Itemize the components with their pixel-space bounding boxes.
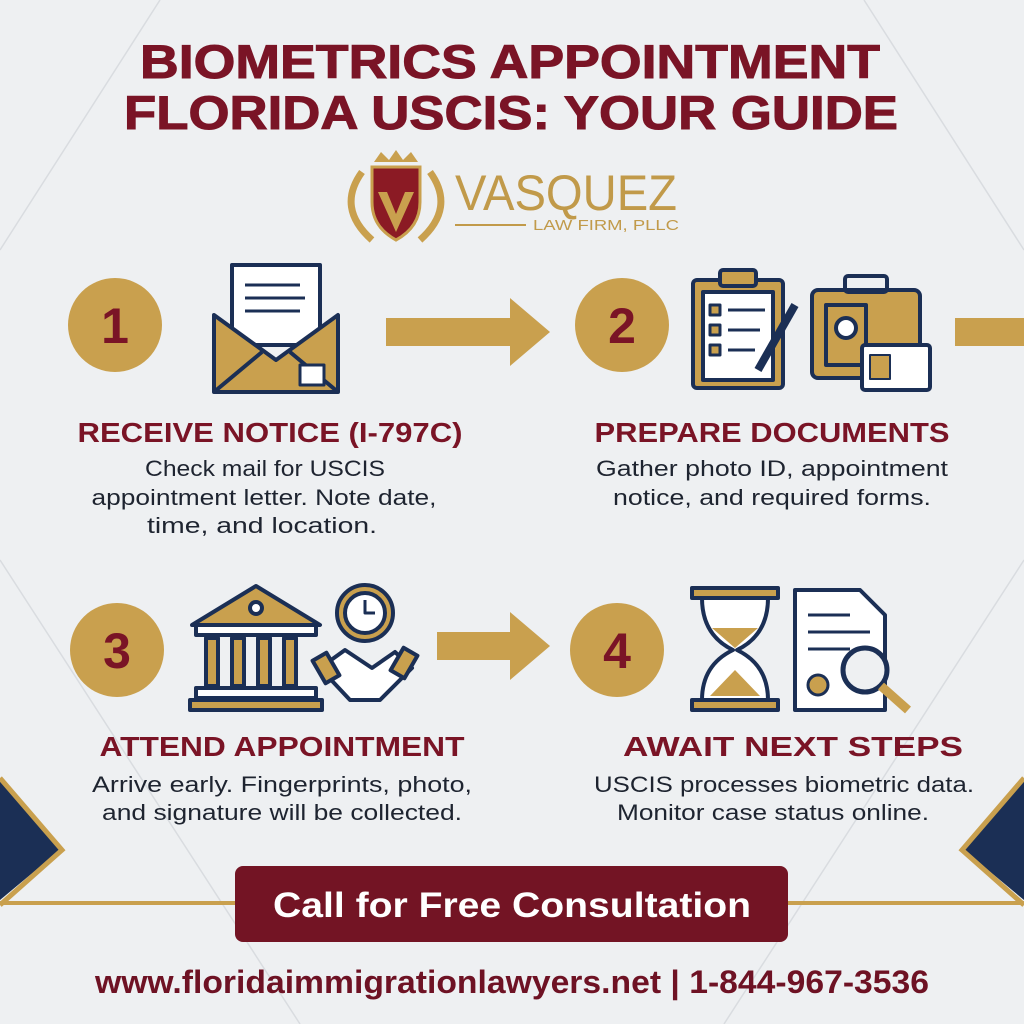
contact line: www.floridaimmigrationlawyers.net | 1-844-967-3536 — [94, 964, 929, 1000]
step 3 text: ATTEND APPOINTMENT — [100, 731, 464, 762]
corner decoration right — [962, 778, 1024, 905]
icon: hourglass and document search — [692, 588, 908, 710]
step 3 number — [70, 603, 164, 697]
corner decoration left — [0, 778, 62, 905]
arrow 3 — [437, 612, 550, 680]
button: Call for Free Consultation — [273, 886, 751, 925]
step 3 number: 3 — [103, 623, 131, 679]
step 2 text: Gather photo ID, appointment — [596, 456, 948, 481]
title: FLORIDA USCIS: YOUR GUIDE — [124, 86, 898, 139]
step 4 text — [594, 731, 974, 825]
step 3 text: and signature will be collected. — [102, 800, 462, 825]
step 1 text: Check mail for USCIS — [145, 456, 385, 481]
step 1 number: 1 — [101, 298, 129, 354]
title — [124, 35, 898, 139]
step 4 text: AWAIT NEXT STEPS — [623, 731, 963, 762]
icon: courthouse handshake clock — [190, 585, 417, 710]
logo: LAW FIRM, PLLC — [533, 217, 679, 234]
step 4 number — [570, 603, 664, 697]
icon: clipboard and briefcase — [693, 270, 930, 390]
step 1 text: time, and location. — [147, 513, 377, 538]
step 3 text: Arrive early. Fingerprints, photo, — [92, 772, 472, 797]
button — [235, 866, 788, 942]
title: BIOMETRICS APPOINTMENT — [140, 35, 880, 88]
step 2 number: 2 — [608, 298, 636, 354]
logo: VASQUEZ — [455, 165, 677, 221]
logo — [351, 150, 679, 240]
step 1 text — [78, 417, 462, 538]
step 4 text: Monitor case status online. — [617, 800, 929, 825]
step 3 text — [92, 731, 472, 825]
arrow partial — [955, 318, 1024, 346]
step 4 text: USCIS processes biometric data. — [594, 772, 974, 797]
arrow 1 — [386, 298, 550, 366]
step 1 text: appointment letter. Note date, — [92, 485, 436, 510]
step 1 number — [68, 278, 162, 372]
step 1 text: RECEIVE NOTICE (I-797C) — [78, 417, 462, 448]
step 4 number: 4 — [603, 623, 631, 679]
icon: envelope — [214, 265, 338, 392]
step 2 text: PREPARE DOCUMENTS — [594, 417, 950, 448]
step 2 text — [594, 417, 950, 510]
step 2 text: notice, and required forms. — [613, 485, 931, 510]
step 2 number — [575, 278, 669, 372]
